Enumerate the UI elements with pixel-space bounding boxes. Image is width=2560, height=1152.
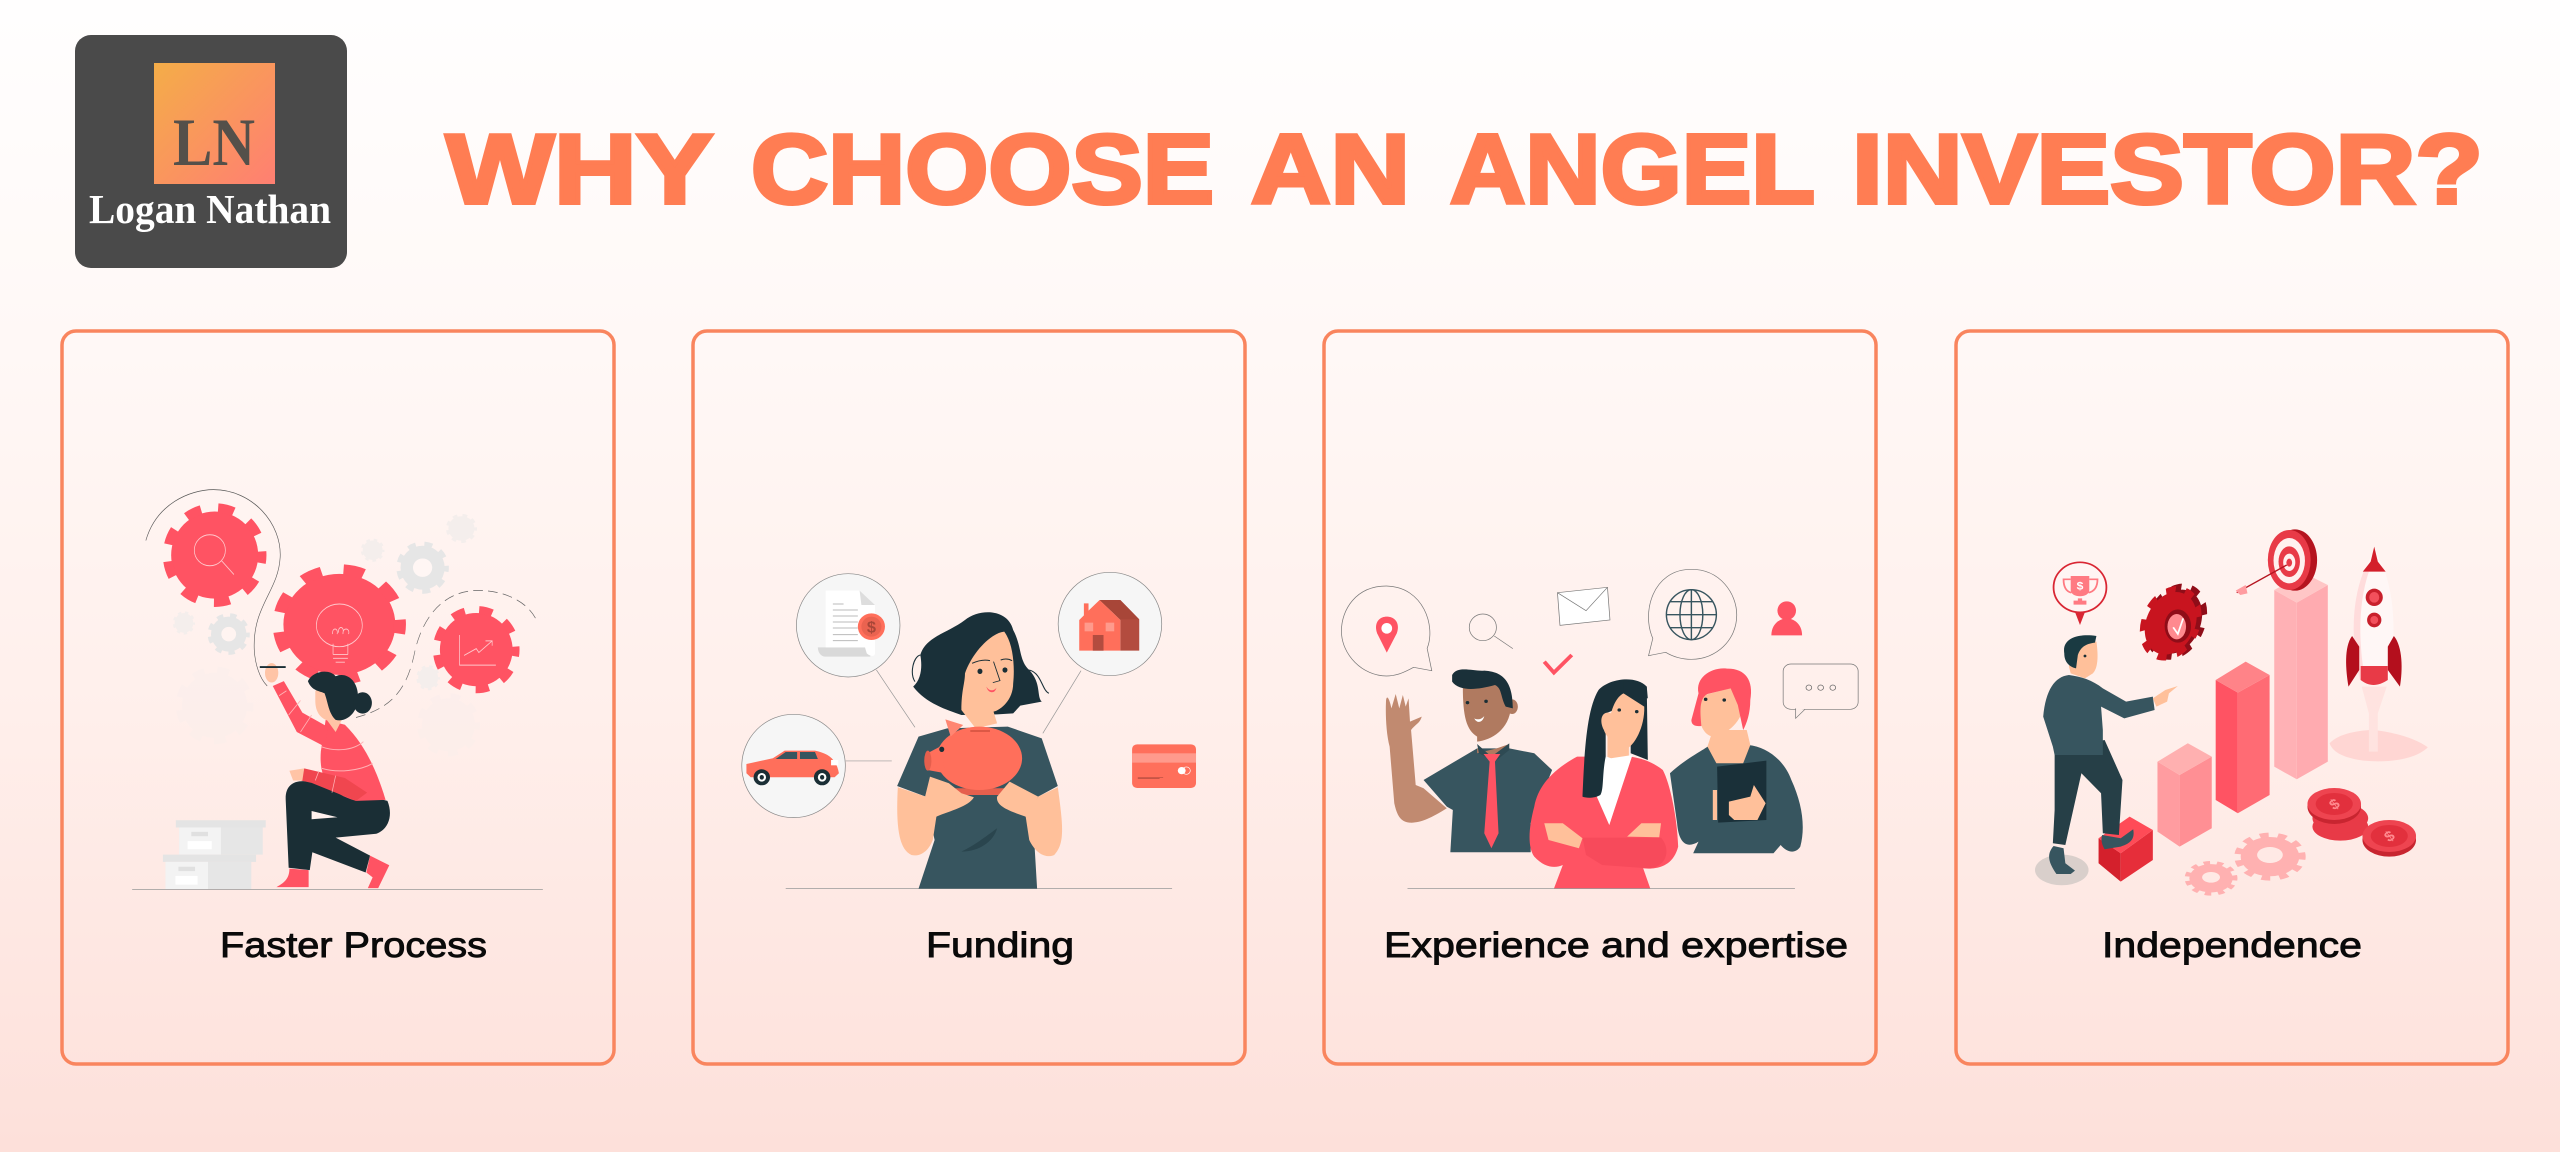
illustration: man with rising bars (2035, 529, 2428, 894)
label: Experience and expertise (1384, 926, 1848, 965)
illustration: woman with piggy bank (742, 572, 1196, 889)
panel: faster process (62, 331, 614, 1064)
label: Faster Process (220, 926, 487, 965)
panel frame (1956, 331, 2508, 1064)
label: Funding (926, 926, 1074, 965)
panel: funding (693, 331, 1245, 1064)
label: Independence (2102, 926, 2362, 965)
title: AN (1251, 114, 1410, 224)
logo mark (154, 63, 275, 184)
title (446, 114, 2483, 224)
title: WHY (446, 114, 713, 224)
panel: experience and expertise (1324, 331, 1876, 1064)
logo (75, 35, 347, 268)
panel frame (693, 331, 1245, 1064)
title: ANGEL (1450, 114, 1815, 224)
title: INVESTOR? (1852, 114, 2483, 224)
illustration: man with rising bars: $ (2077, 580, 2084, 592)
panel frame (62, 331, 614, 1064)
illustration: team of three with icons (1341, 569, 1858, 889)
panel: independence (1956, 331, 2508, 1064)
logo monogram: LN (173, 104, 255, 180)
illustration: woman with piggy bank: $ (867, 620, 876, 636)
logo wordmark: Logan Nathan (89, 186, 331, 232)
title: CHOOSE (751, 114, 1214, 224)
illustration: man with rising bars: $ (2326, 795, 2344, 814)
panel frame (1324, 331, 1876, 1064)
illustration: man with rising bars: $ (2381, 827, 2399, 846)
illustration: woman drawing gears (132, 490, 543, 890)
